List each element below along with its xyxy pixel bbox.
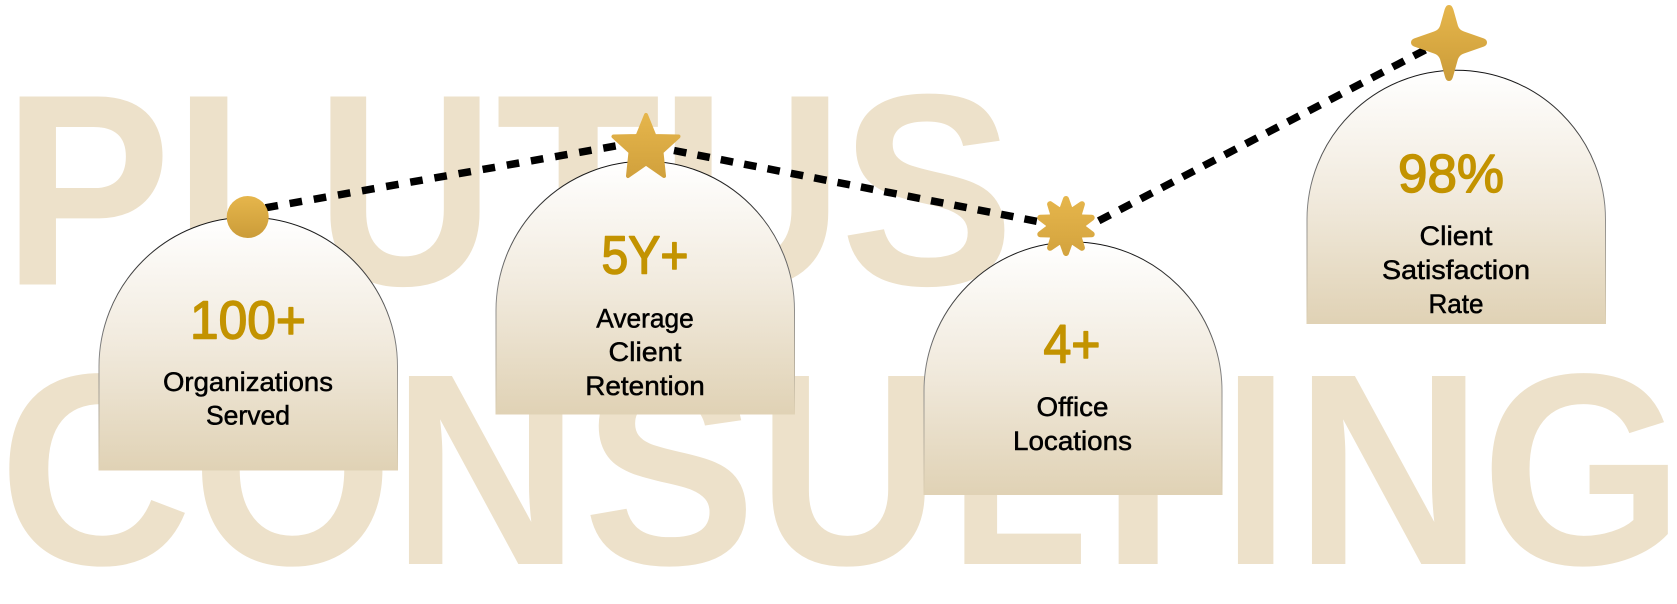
label: Organizations Served: Organizations xyxy=(163,367,333,397)
label: Client Satisfaction Rate xyxy=(1382,221,1530,319)
label: Average Client Retention: Average xyxy=(596,304,694,334)
icon: gold four-point sparkle xyxy=(1411,5,1487,81)
label: Client Satisfaction Rate: Satisfaction xyxy=(1382,255,1530,285)
label: Average Client Retention: Retention xyxy=(585,371,705,401)
dashed trend line xyxy=(266,38,1449,227)
label: Client Satisfaction Rate: Rate xyxy=(1428,289,1484,319)
background word: PLUTUS: T xyxy=(496,37,661,343)
card: client satisfaction rate xyxy=(1307,70,1606,324)
card: organizations served xyxy=(99,217,398,470)
icon: gold sunburst xyxy=(1040,199,1092,253)
label: Office Locations: Office xyxy=(1036,392,1108,422)
label: Client Satisfaction Rate: Client xyxy=(1420,221,1493,251)
background word: PLUTUS: U xyxy=(660,39,844,343)
value: 100+: 100+ xyxy=(190,292,306,350)
background word: PLUTUS xyxy=(3,37,1015,343)
background word: PLUTUS: U xyxy=(316,38,495,343)
background word: PLUTUS: L xyxy=(173,38,331,343)
icon: gold star xyxy=(614,115,678,176)
background word: CONSULTING xyxy=(0,316,1677,604)
card: average client retention xyxy=(496,161,794,414)
label: Organizations Served xyxy=(163,367,333,430)
background word: PLUTUS: P xyxy=(3,37,171,343)
label: Average Client Retention xyxy=(585,304,705,401)
value: 4+: 4+ xyxy=(1044,316,1100,374)
label: Average Client Retention: Client xyxy=(608,337,682,367)
icon: gold circle xyxy=(227,196,269,238)
value: 98%: 98% xyxy=(1398,145,1504,204)
label: Office Locations: Locations xyxy=(1013,426,1132,456)
value: 5Y+: 5Y+ xyxy=(602,226,688,286)
label: Organizations Served: Served xyxy=(206,400,290,430)
label: Office Locations xyxy=(1013,392,1132,456)
background word: PLUTUS: S xyxy=(840,37,1015,343)
card: office locations xyxy=(924,242,1222,494)
